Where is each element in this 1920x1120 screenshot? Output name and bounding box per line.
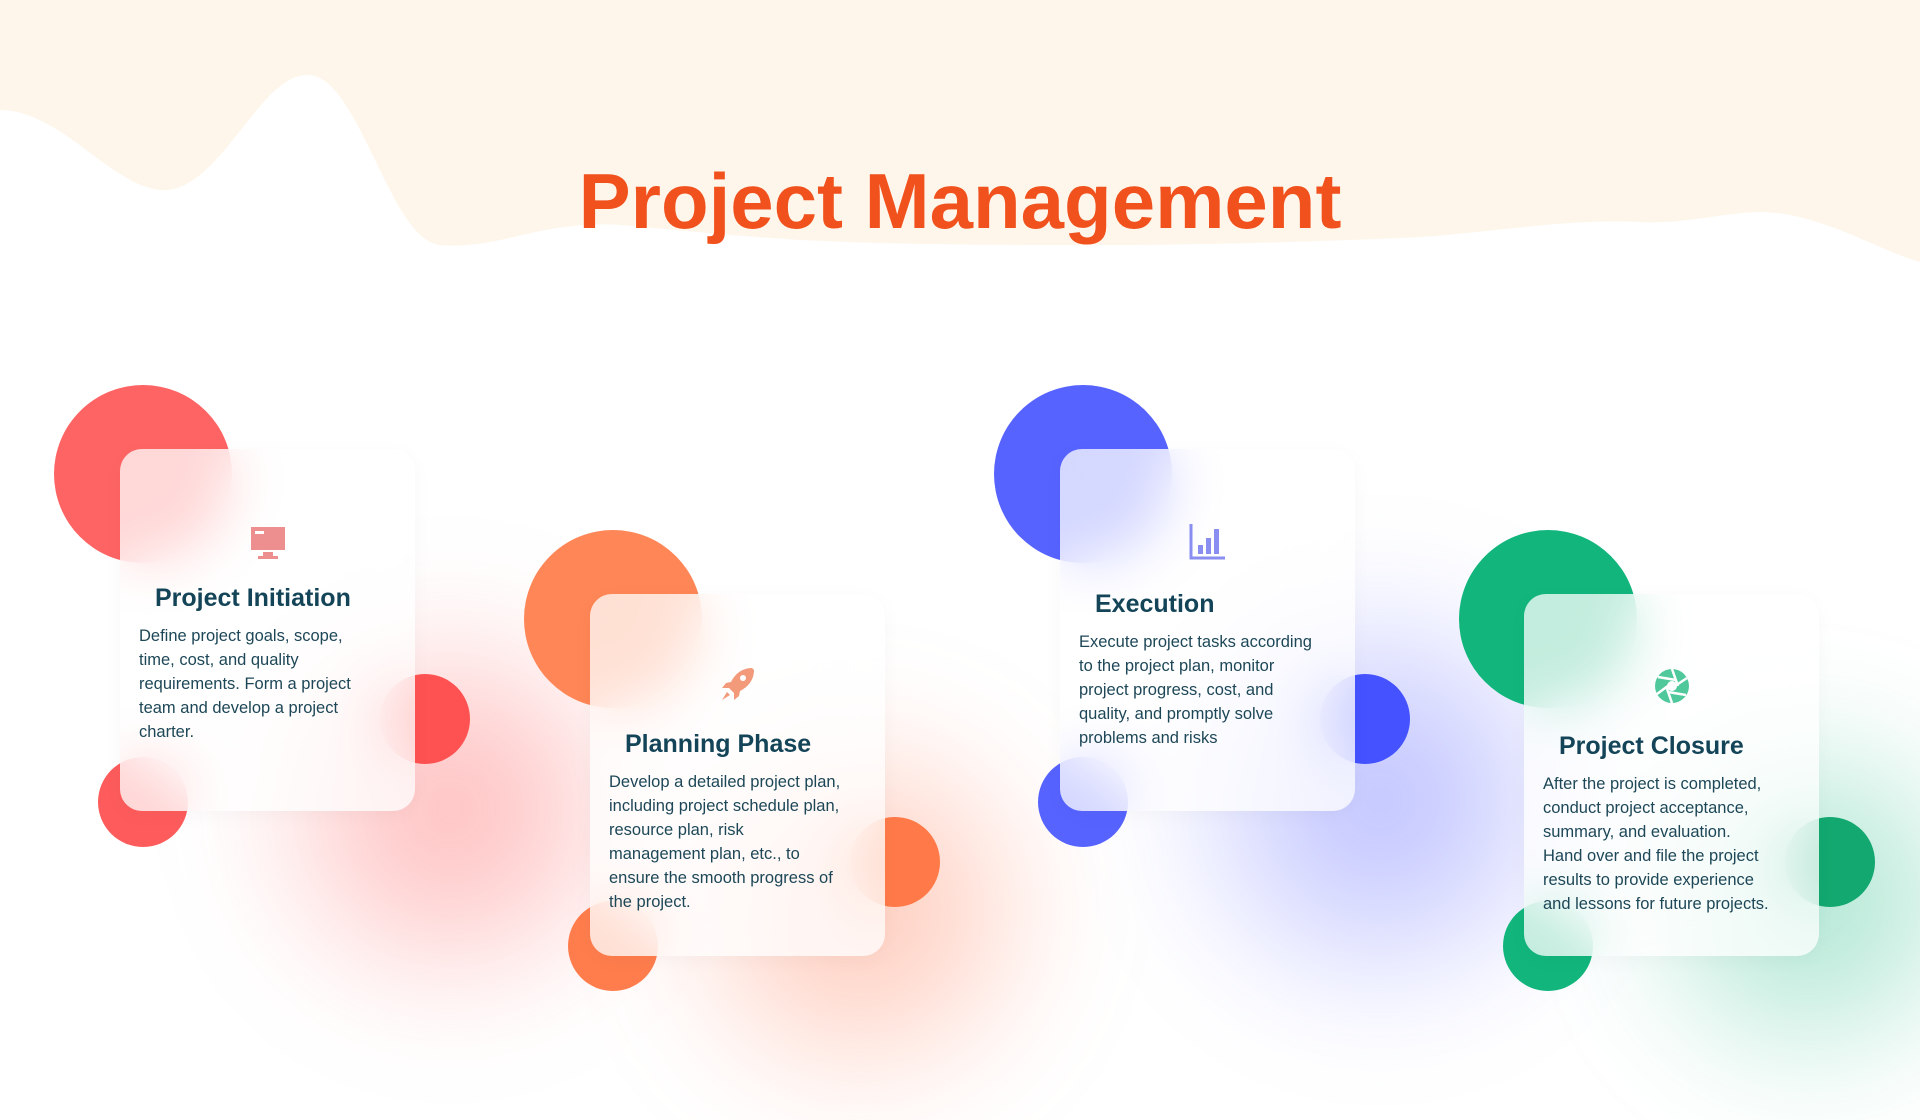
icon: aperture — [1655, 669, 1689, 703]
heading: Project Closure — [1559, 732, 1744, 760]
heading: Project Initiation — [155, 584, 351, 612]
text block: ensure the smooth progress of — [609, 869, 833, 887]
icon: rocket — [722, 668, 754, 700]
text block: conduct project acceptance, — [1543, 799, 1748, 817]
text block: requirements. Form a project — [139, 675, 351, 693]
text block: resource plan, risk — [609, 821, 744, 839]
heading: Execution — [1095, 590, 1214, 618]
glows — [230, 580, 670, 1040]
icon: bar chart — [1190, 524, 1225, 560]
text block — [1079, 633, 1312, 747]
text block: summary, and evaluation. — [1543, 823, 1731, 841]
text block: including project schedule plan, — [609, 797, 839, 815]
text block: Hand over and file the project — [1543, 847, 1759, 865]
icon: monitor — [251, 527, 285, 559]
text block: to the project plan, monitor — [1079, 657, 1274, 675]
text block: After the project is completed, — [1543, 775, 1761, 793]
text block — [609, 773, 840, 911]
panel: planning phase — [524, 530, 940, 991]
text block: quality, and promptly solve — [1079, 705, 1273, 723]
text block — [139, 627, 351, 741]
text block: management plan, etc., to — [609, 845, 800, 863]
panel: project initiation — [54, 385, 470, 847]
title: Project Management — [579, 157, 1341, 245]
text block: charter. — [139, 723, 194, 741]
text block: Develop a detailed project plan, — [609, 773, 840, 791]
text block: results to provide experience — [1543, 871, 1754, 889]
text block: and lessons for future projects. — [1543, 895, 1769, 913]
text block: project progress, cost, and — [1079, 681, 1273, 699]
background wave — [0, 0, 1920, 262]
text block: team and develop a project — [139, 699, 338, 717]
text block: Execute project tasks according — [1079, 633, 1312, 651]
text block: Define project goals, scope, — [139, 627, 343, 645]
panel: project closure — [1459, 530, 1875, 991]
heading: Planning Phase — [625, 730, 811, 758]
text block: the project. — [609, 893, 691, 911]
panel: execution — [994, 385, 1410, 847]
text block: problems and risks — [1079, 729, 1217, 747]
text block — [1543, 775, 1769, 913]
text block: time, cost, and quality — [139, 651, 299, 669]
